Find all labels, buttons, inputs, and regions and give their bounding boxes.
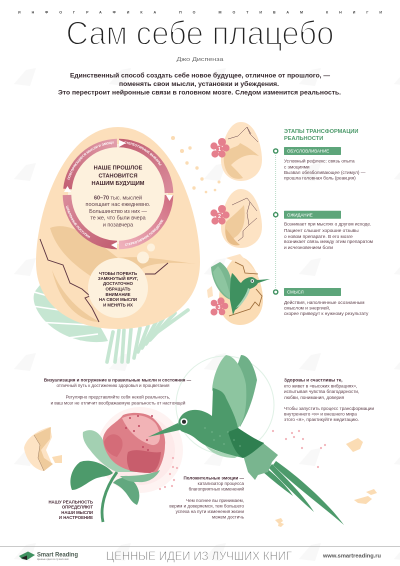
far wing: [232, 355, 257, 427]
bubble text: ВНИМАНИЕ: [105, 292, 131, 297]
egg stage 1: [210, 122, 262, 181]
stage 3: скорее приведут к нужному результату: [284, 311, 369, 316]
ring center text: 60–70 тыс. мыслей: [94, 195, 142, 202]
stage 3: СМЫСЛ: [287, 290, 304, 295]
ring: ПОВТОРЯЮЩИЕСЯ МЫСЛИ И ЭМОЦИИ: [68, 141, 114, 180]
text: healthy and happy: Чтобы запустить процесс трансформации: [284, 406, 374, 411]
flower 3: [210, 297, 228, 316]
ring center text: НАШЕ ПРОШЛОЕ: [94, 165, 143, 171]
ring: ШАБЛОННЫЕ ПОСТУПКИ: [66, 206, 90, 238]
header: small overline: ИНФОГРАФИКА ПО МОТИВАМ КНИГИ: [18, 10, 382, 14]
text: healthy and happy: любви, понимания, доверия: [284, 395, 345, 400]
body: [178, 388, 264, 458]
ring center text: НАШИМ БУДУЩИМ: [92, 181, 145, 187]
logo text: Smart Reading: [37, 552, 78, 558]
text: healthy and happy: испытывая чувства благодарности,: [284, 389, 359, 394]
text: visualization: отличный путь к достижению здоровья и процветания: [57, 382, 170, 388]
bubble text: НА СВОИ МЫСЛИ: [99, 297, 137, 302]
belly: [205, 445, 243, 458]
pink dots: [159, 430, 326, 490]
stage 2: ОЖИДАНИЕ: [287, 212, 313, 217]
stage 1: с эмоциями: [284, 164, 310, 169]
text: healthy and happy: внутреннего «я» и внешнего мира: [284, 411, 357, 416]
text: positive emotions: Чем полнее вы принимаем,: [186, 498, 244, 503]
egg stage 3 with hummingbird: [207, 254, 270, 325]
cracks: [40, 239, 168, 322]
big egg: [36, 127, 200, 329]
text: visualization: и ваш мозг не отличит воображаемую реальность от настоящей: [51, 400, 186, 406]
big hummingbird: [148, 355, 344, 525]
stage 1: прошла головная боль (реакция): [284, 175, 356, 180]
lead text: Единственный способ создать себе новое будущее, отличное от прошлого, —: [70, 71, 331, 79]
text: healthy and happy: [284, 378, 374, 422]
text: healthy and happy: Здоровы и счастливы те,: [284, 378, 343, 383]
stages heading: РЕАЛЬНОСТИ: [284, 136, 323, 142]
lead text: поменять свои мысли, установки и убеждения.: [119, 80, 279, 88]
text: our reality: [48, 500, 93, 520]
dark wing shadow: [228, 428, 264, 458]
text: visualization: Визуализация и погружение в правильные мысли и состояния —: [44, 378, 192, 382]
small hummingbird: [211, 262, 270, 315]
title: Сам себе плацебо: [66, 14, 334, 52]
bubble text: ЧТОБЫ ПОРВАТЬ: [99, 271, 137, 276]
ring center text: [86, 165, 150, 228]
stage 2: и исчезновением боли: [284, 245, 333, 250]
stage 2: о новом препарате. В его мозге: [284, 234, 353, 239]
bubble text: ДОСТАТОЧНО: [103, 281, 134, 286]
flower 2: [210, 205, 230, 225]
stage 2: возникает связь между этим препаратом: [284, 239, 373, 244]
tagline: ЦЕННЫЕ ИДЕИ ИЗ ЛУЧШИХ КНИГ: [106, 551, 293, 563]
ring center text: и позавчера: [103, 222, 133, 228]
flower 1: [210, 138, 230, 158]
bubble text: ОБРАЩАТЬ: [105, 286, 131, 292]
timeline: [274, 149, 278, 294]
beak: [148, 423, 180, 437]
bubble text: ЗАМКНУТЫЙ КРУГ,: [98, 276, 138, 281]
ring: СТЕРЕОТИПНОЕ ПОВЕДЕНИЕ: [125, 219, 164, 246]
stage 3: смыслом и энергией,: [284, 304, 330, 310]
stage 1: Вызвал обезболивающее (стимул) —: [284, 170, 366, 175]
text: our reality: И НАСТРОЕНИЕ: [59, 515, 93, 520]
egg stage 2: [210, 189, 262, 248]
stage 2: [284, 211, 373, 250]
stage 1: Условный рефлекс: связь опыта: [284, 158, 355, 164]
stage 3: Действия, наполненные осознанным: [284, 299, 364, 305]
ring: СТЕРЕОТИПНЫЕ ВЫБОРЫ: [124, 142, 162, 166]
tail fan: [243, 443, 278, 480]
near wing: [212, 355, 246, 428]
ring center text: СТАНОВИТСЯ: [99, 173, 137, 179]
logo icon: [19, 552, 35, 560]
footer: [0, 547, 400, 563]
bubble text: И МЕНЯТЬ ИХ: [103, 302, 133, 307]
lead text: Это перестроит нейронные связи в головном мозге. Следом изменится реальность.: [58, 88, 341, 96]
text: positive emotions: верим и доверяемся, тем большего: [169, 504, 244, 508]
author: Джо Диспенза: [176, 57, 225, 63]
stages heading: ЭТАПЫ ТРАНСФОРМАЦИИ: [284, 129, 358, 135]
text: positive emotions: Положительные эмоции —: [184, 475, 244, 480]
text: positive emotions: можем достичь: [212, 515, 245, 520]
text: visualization: Регулярно представляйте себя некой реальность,: [66, 394, 170, 400]
ring center text: посещает нас ежедневно.: [86, 202, 150, 208]
pale ripples: [97, 356, 274, 493]
stages heading: [284, 129, 358, 142]
thought bubbles: [88, 244, 155, 318]
text: visualization: [44, 378, 192, 406]
eggshell shards: [24, 427, 377, 527]
text: positive emotions: успеха на пути изменения жизни: [176, 509, 244, 514]
footer: Ценные идеи из лучших книг: [37, 559, 69, 561]
website: www.smartreading.ru: [322, 554, 381, 560]
text: our reality: ОПРЕДЕЛЯЮТ: [62, 505, 93, 510]
text: positive emotions: [169, 475, 245, 520]
text: our reality: НАШУ РЕАЛЬНОСТЬ: [48, 500, 93, 504]
lead text: [58, 71, 341, 96]
eye: [180, 418, 188, 425]
decorative monstera leaves: [32, 278, 188, 362]
tail streamers: [263, 461, 344, 525]
text: positive emotions: катализатор процесса: [198, 481, 244, 486]
ring center text: те же, что были вчера: [90, 216, 146, 222]
text: our reality: НАШИ МЫСЛИ: [61, 510, 93, 515]
stage 1: [284, 147, 366, 180]
egg stage 2: 2: [218, 214, 221, 220]
text: healthy and happy: кто живет в «высоких вибрациях»,: [284, 383, 357, 388]
stage 3: [284, 288, 369, 316]
stage 2: Пациент слышит хорошие отзывы: [284, 228, 359, 233]
flower with leaves: [70, 413, 165, 522]
ring center text: Большинство из них —: [89, 209, 147, 215]
egg stage 1: 1: [218, 147, 221, 153]
dots between egg and stages: [171, 136, 220, 193]
text: healthy and happy: этого «я», практикуйте медитацию.: [284, 416, 359, 422]
stage 2: Возникает при мыслях о другом исходе.: [284, 222, 371, 227]
ring: [62, 138, 174, 250]
bubble text: [98, 271, 138, 307]
text: positive emotions: благоприятных изменений: [189, 486, 244, 492]
stage 1: ОБУСЛОВЛИВАНИЕ: [287, 149, 329, 154]
egg stage 3 with hummingbird: 3: [218, 305, 221, 311]
